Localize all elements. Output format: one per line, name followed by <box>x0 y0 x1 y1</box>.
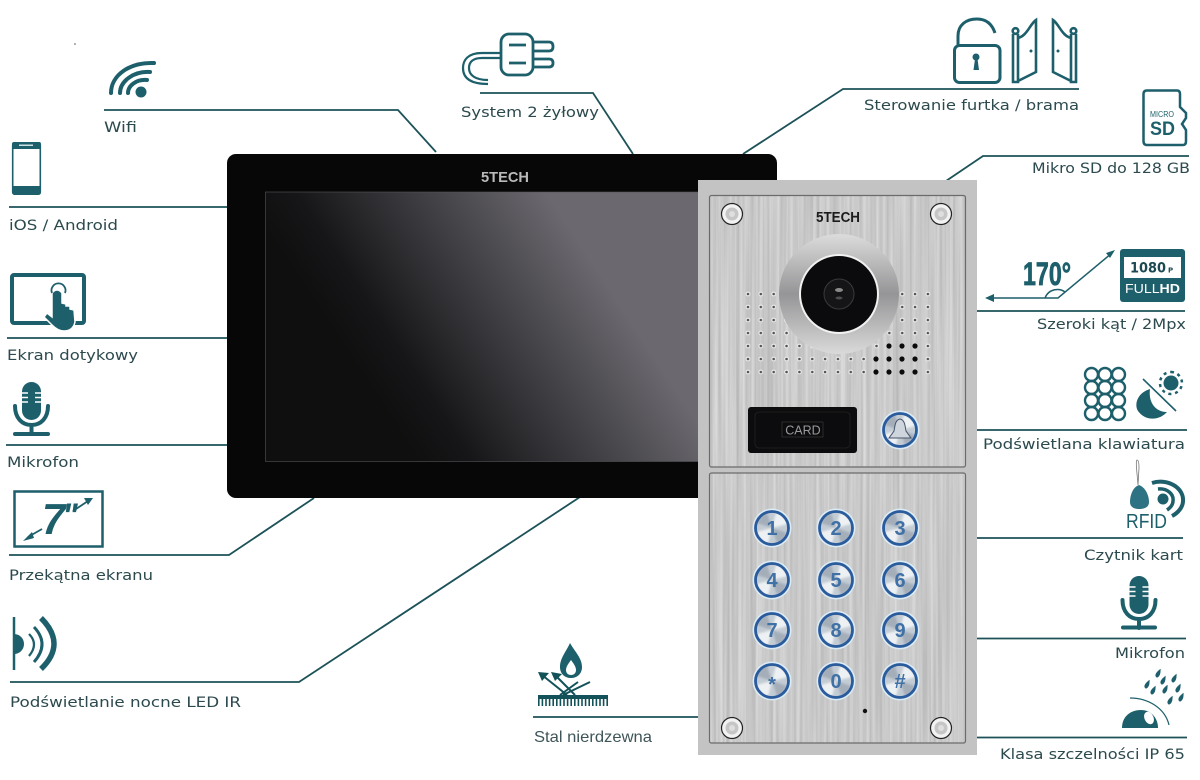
icon: 7 inch: " <box>62 497 79 535</box>
connector: gate control <box>743 89 1079 154</box>
keypad: 8 <box>830 620 842 642</box>
keypad: 5 <box>830 570 842 592</box>
label: touch screen: Ekran dotykowy <box>7 348 138 364</box>
icon: micro SD: SD <box>1150 119 1175 140</box>
label: micro SD: Mikro SD do 128 GB <box>1032 161 1190 177</box>
connector: IR LED <box>10 497 580 682</box>
panel: micro SD <box>946 90 1190 181</box>
panel: RFID reader <box>977 460 1183 564</box>
label: gate control: Sterowanie furtka / brama <box>864 98 1079 114</box>
connector: microphone <box>6 444 228 446</box>
icon: microphone <box>13 382 50 436</box>
connector: micro SD <box>946 156 1189 181</box>
icon: micro SD: MICRO <box>1150 110 1174 119</box>
call button <box>880 410 920 450</box>
keypad: 4 <box>766 570 778 592</box>
label: keypad: Podświetlana klawiatura <box>983 437 1185 453</box>
panel: gate control <box>743 19 1079 154</box>
label: diagonal: Przekątna ekranu <box>9 568 153 584</box>
panel: screen diagonal <box>9 492 314 584</box>
connector: RFID <box>977 537 1183 539</box>
panel: two wire system <box>461 34 633 154</box>
connector: microphone right <box>977 638 1186 640</box>
keypad: # <box>894 671 906 693</box>
label: microphone: Mikrofon <box>7 455 79 471</box>
icon: 7 inch: 7 <box>42 495 65 544</box>
upper plate <box>710 196 966 467</box>
speaker grille <box>742 288 935 379</box>
label: iOS: iOS / Android <box>9 218 118 234</box>
icon: RFID: RFID <box>1126 511 1167 533</box>
keypad: 2 <box>830 518 842 540</box>
panel: iOS / Android <box>9 142 228 234</box>
keypad <box>752 508 920 700</box>
keypad: 6 <box>894 570 906 592</box>
label: microphone right: Mikrofon <box>1115 646 1185 662</box>
connector: IP 65 <box>977 736 1187 738</box>
upper plate outline <box>710 196 966 467</box>
icon: 7 inch <box>14 492 102 546</box>
monitor screen <box>266 192 700 462</box>
icon: 170 degree angle <box>985 250 1115 302</box>
panel: microphone right <box>977 576 1186 662</box>
connector: two wire <box>480 93 633 154</box>
lower plate outline <box>710 473 966 743</box>
screws <box>722 204 952 738</box>
icon: keypad <box>1085 368 1125 420</box>
label: IP 65: Klasa szczelności IP 65 <box>1000 747 1185 763</box>
camera <box>779 234 899 354</box>
label: two wire: System 2 żyłowy <box>461 105 599 121</box>
connector: diagonal <box>9 498 314 555</box>
icon: microphone <box>1121 576 1157 630</box>
card reader: CARD <box>785 424 821 438</box>
door station frame <box>698 180 977 755</box>
station logo: 5TECH <box>816 210 860 226</box>
monitor body <box>227 154 777 498</box>
icon: RFID <box>1126 460 1183 533</box>
icon: padlock and gates <box>954 19 1076 82</box>
monitor <box>227 154 777 498</box>
panel: wifi <box>104 63 436 152</box>
icon: IR LED <box>14 617 54 670</box>
icon: touch screen <box>12 275 84 331</box>
icon: stainless steel <box>538 643 608 702</box>
panel: wide angle <box>977 249 1186 333</box>
icon: plug <box>463 34 553 84</box>
icon: 1080p full HD: FULLHD <box>1125 281 1180 296</box>
panel: backlit keypad <box>977 368 1187 453</box>
keypad: * <box>768 674 776 696</box>
label: wifi: Wifi <box>104 120 137 136</box>
icon: 170 degree angle: 170° <box>1023 256 1071 292</box>
connector: wifi <box>104 110 436 152</box>
monitor logo: 5TECH <box>481 169 529 186</box>
panel: microphone left <box>6 382 228 471</box>
label: IR LED: Podświetlanie nocne LED IR <box>10 695 241 711</box>
keypad: 3 <box>894 518 906 540</box>
microphone hole <box>863 709 867 713</box>
panel: IR LED <box>10 497 580 711</box>
connector: stainless steel <box>533 716 698 718</box>
icon: wifi <box>111 63 154 98</box>
card reader <box>748 407 857 453</box>
connector: wide angle <box>977 310 1185 312</box>
lower plate <box>710 473 966 743</box>
icon: 1080p full HD <box>1120 249 1185 302</box>
keypad: 9 <box>894 620 906 642</box>
panel: touch screen <box>7 275 228 364</box>
icon: 1080p full HD: P <box>1168 266 1173 274</box>
label: stainless steel: Stal nierdzewna <box>534 729 652 746</box>
label: RFID: Czytnik kart <box>1084 548 1183 564</box>
icon: IP 65 dome and rain <box>1122 670 1183 728</box>
icon: day and night <box>1136 372 1182 419</box>
label: wide angle: Szeroki kąt / 2Mpx <box>1037 317 1186 333</box>
keypad: 1 <box>766 518 778 540</box>
panel: IP 65 <box>977 670 1187 763</box>
connector: touch screen <box>7 337 228 339</box>
keypad: 0 <box>830 671 842 693</box>
door station <box>698 180 977 755</box>
icon: phone <box>12 142 41 195</box>
connector: iOS <box>9 206 228 208</box>
icon: micro SD <box>1144 90 1186 145</box>
panel: stainless steel <box>533 643 698 746</box>
icon: 1080p full HD: 1080 <box>1130 260 1166 276</box>
connector: keypad <box>977 429 1187 431</box>
speck <box>74 43 76 45</box>
keypad: 7 <box>766 620 778 642</box>
